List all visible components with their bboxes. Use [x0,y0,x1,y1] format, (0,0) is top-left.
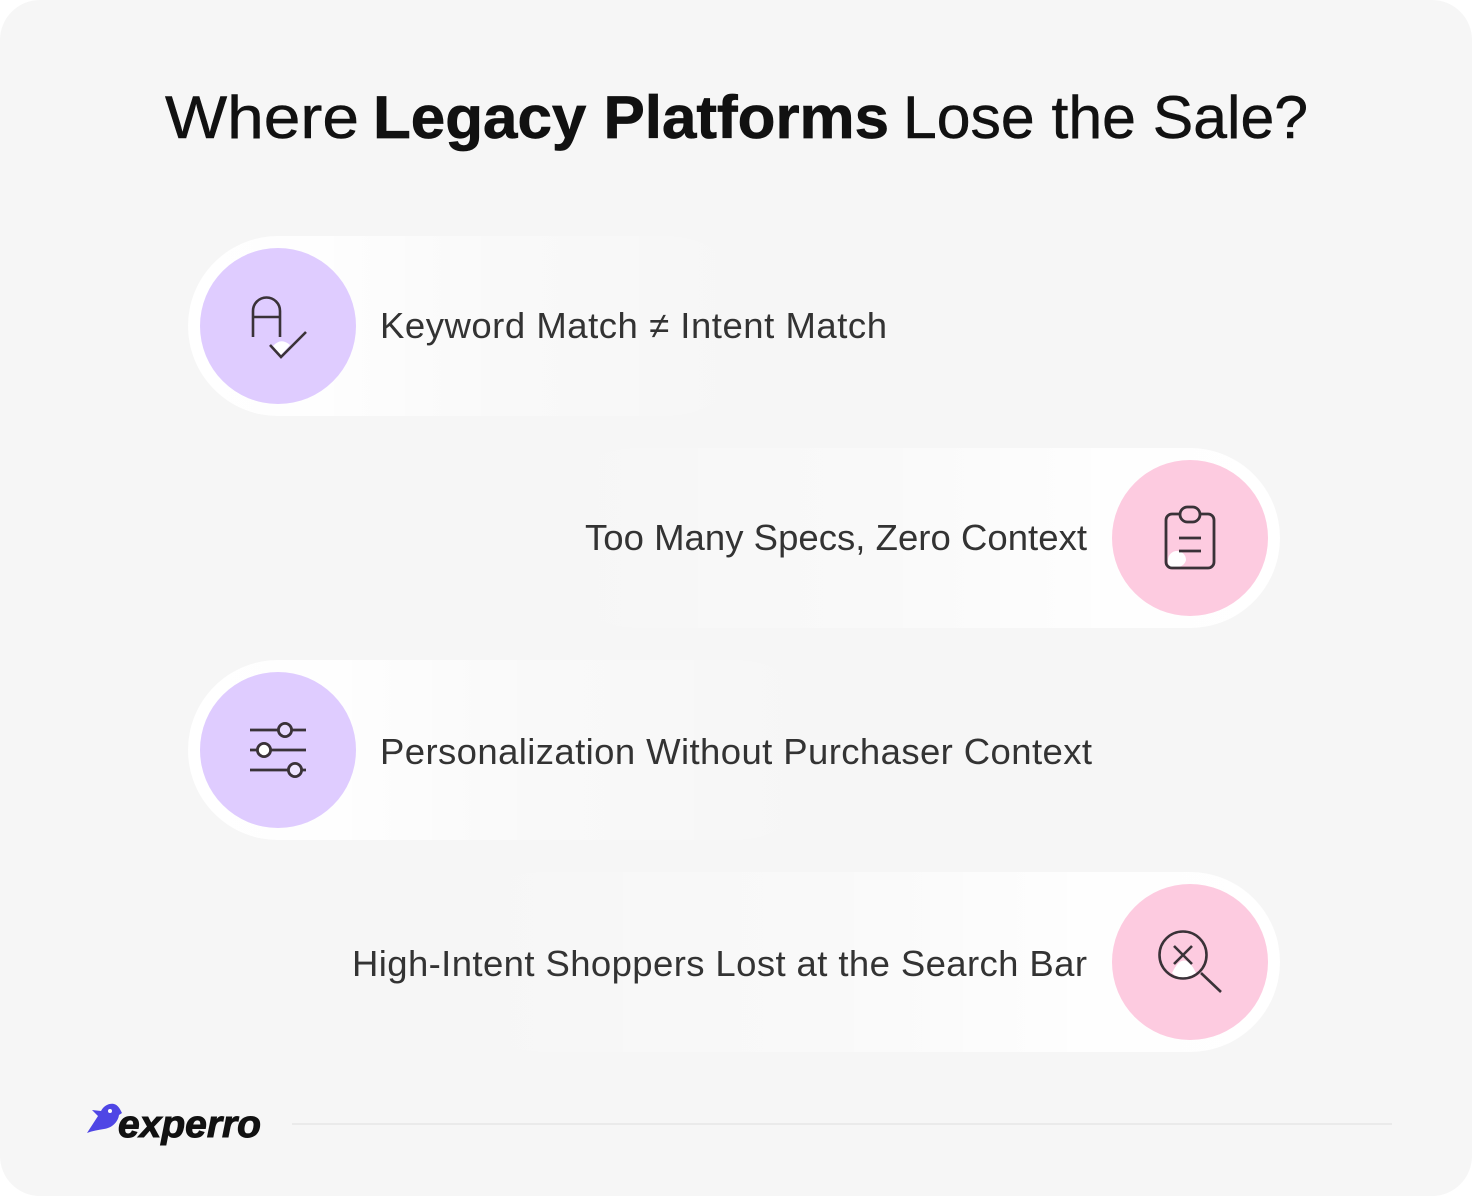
panel: personalization [188,660,1092,840]
icon: clipboard [1112,460,1268,616]
icon: sliders [200,672,356,828]
title: Where [165,84,359,151]
label: specs: Too Many Specs, Zero Context [585,517,1087,558]
icon: letter A with check mark [200,248,356,404]
label: keyword match: Keyword Match ≠ Intent Match [380,305,887,346]
icon: search with x [1112,884,1268,1040]
pill background 1 [188,236,758,416]
wordmark: experro [118,1104,261,1146]
label: personalization: Personalization Without Purchaser Context [380,731,1092,772]
pill background 2 [545,448,1280,628]
panel: search bar [352,872,1280,1052]
title: Legacy Platforms [373,84,889,151]
logo: experro [87,1104,261,1146]
panel: specs [545,448,1280,628]
pill background 4 [450,872,1280,1052]
label: search bar: High-Intent Shoppers Lost at the Search Bar [352,943,1087,984]
title: Lose the Sale? [903,84,1308,151]
pill background 3 [188,660,828,840]
title [165,84,1308,151]
panel: keyword match [188,236,887,416]
icon: bird [87,1104,122,1133]
